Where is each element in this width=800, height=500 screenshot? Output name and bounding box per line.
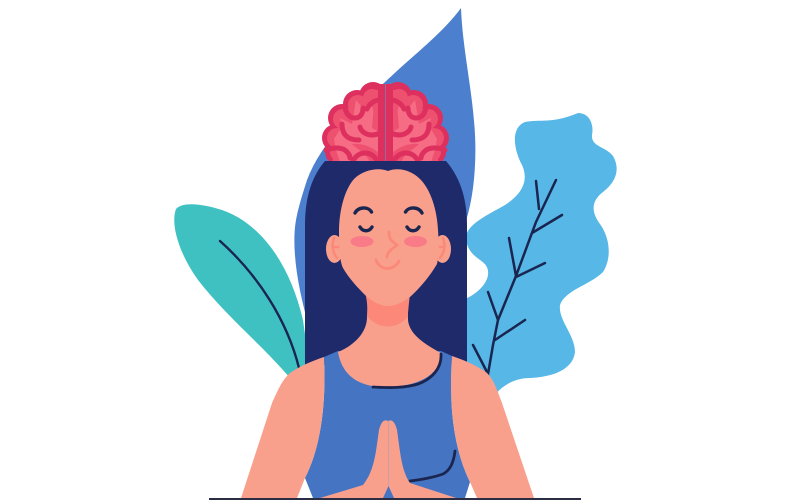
right arm: [451, 356, 534, 498]
neck shadow: [365, 292, 410, 326]
praying hands: [320, 420, 456, 498]
tall blue leaf: [294, 8, 475, 330]
torso top: [305, 351, 470, 498]
blush: [350, 236, 427, 247]
waist seam: [410, 451, 455, 481]
illustration: meditating woman with brain: [174, 8, 617, 500]
face: [339, 169, 439, 306]
closed eyes: [360, 227, 419, 231]
left arm: [241, 357, 324, 498]
hair: [305, 161, 467, 365]
neck and chest: [338, 280, 441, 387]
teal leaf vein: [220, 241, 299, 368]
eyebrows: [355, 208, 422, 213]
table line: [209, 498, 581, 500]
neckline seam: [373, 354, 441, 388]
teal leaf: [174, 204, 310, 378]
light blue leaf veins: [473, 180, 562, 380]
ears: [326, 235, 451, 263]
light blue wavy leaf: [440, 113, 617, 400]
mouth: [376, 260, 399, 268]
nose: [387, 232, 397, 257]
brain: [322, 82, 449, 165]
